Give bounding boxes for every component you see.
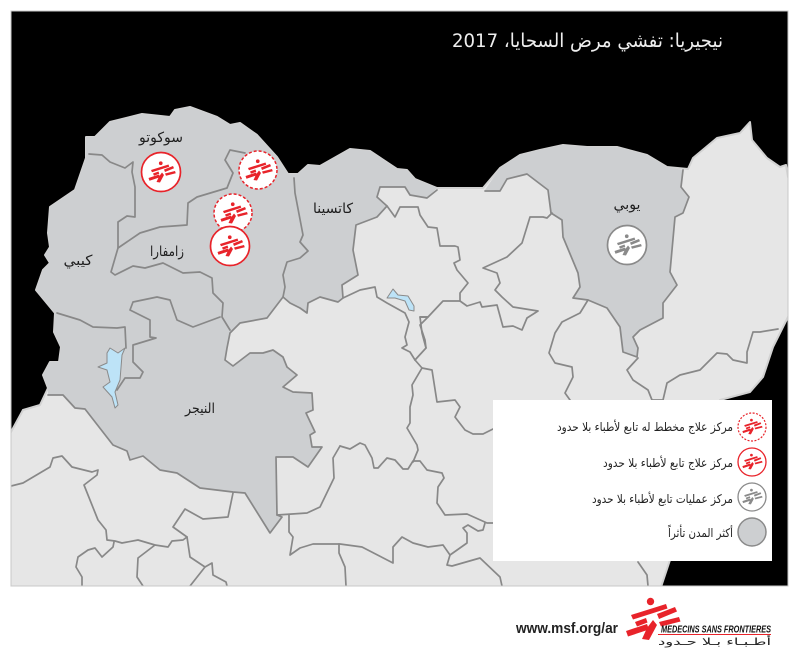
legend text: most affected: أكثر المدن تأثراً (668, 524, 733, 541)
marker: treatment centre, Zamfara (210, 226, 250, 266)
title: نيجيريا: تفشي مرض السحايا، 2017 (452, 30, 723, 52)
legend icon: treatment centre (738, 448, 766, 476)
map (5, 107, 795, 590)
legend swatch: most affected (738, 518, 766, 546)
affected state: Yobe (485, 145, 689, 357)
logo arabic name: أطـبـاء بـلا حـدود (658, 635, 771, 648)
state label: Kebbi: كيبي (64, 253, 93, 269)
land base (5, 107, 795, 590)
state label: Katsina: كاتسينا (313, 201, 353, 217)
affected states: Sokoto, Zamfara, Kebbi, Katsina, Niger (36, 107, 437, 533)
legend (493, 400, 772, 561)
state label: Zamfara: زامفارا (150, 244, 184, 260)
lake: Kainji (98, 348, 125, 408)
lake: Kano area (387, 289, 414, 311)
state label: Niger: النيجر (184, 401, 215, 417)
legend text: operations centre: مركز عمليات تابع لأطباء بلا حدود (592, 491, 733, 507)
marker: planned treatment centre, Zamfara north (239, 151, 277, 189)
state label: Yobe: يوبي (614, 197, 641, 213)
marker: operations centre, Yobe (608, 226, 646, 264)
legend text: treatment centre: مركز علاج تابع لأطباء بلا حدود (603, 455, 733, 471)
state label: Sokoto: سوكوتو (138, 130, 183, 146)
website url: www.msf.org/ar (515, 620, 618, 637)
legend text: planned treatment centre: مركز علاج مخطط له تابع لأطباء بلا حدود (557, 419, 733, 435)
state boundaries (11, 150, 778, 586)
legend icon: operations centre (738, 483, 766, 511)
marker: treatment centre, Sokoto (142, 152, 180, 192)
marker: planned treatment centre, Zamfara centre (214, 194, 252, 232)
legend icon: planned treatment centre (738, 413, 766, 441)
logo mark (626, 598, 680, 640)
MSF logo (626, 598, 771, 648)
